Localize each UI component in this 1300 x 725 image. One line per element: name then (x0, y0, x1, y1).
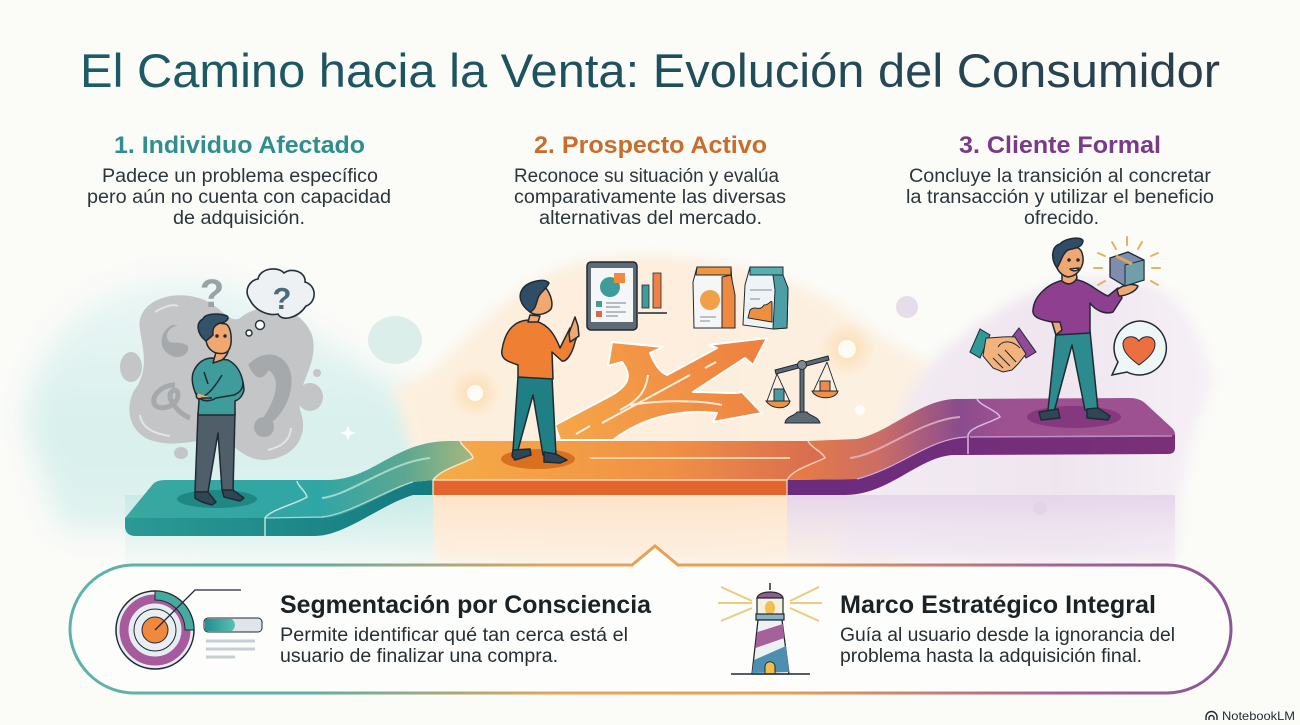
stage 1 description: pero aún no cuenta con capacidad (87, 187, 391, 208)
stage 1 description: Padece un problema específico (102, 166, 378, 187)
icon: target diagram (116, 590, 262, 669)
heading: marco estratégico: Marco Estratégico Integral (840, 591, 1156, 619)
bottom summary panel (70, 546, 1231, 693)
icon: glowing package (1094, 237, 1160, 286)
icon: handshake (970, 328, 1036, 372)
fan of path arrows (555, 338, 767, 440)
icon: product bag orange (693, 267, 735, 328)
text: marco estratégico: Guía al usuario desde la ignorancia del (840, 625, 1175, 646)
icon: lighthouse (718, 583, 822, 674)
stage 2 description: comparativamente las diversas (514, 187, 786, 208)
stage 3 heading: 3. Cliente Formal (959, 132, 1161, 159)
stage 2 description: Reconoce su situación y evalúa (514, 166, 779, 187)
title: El Camino hacia la Venta: Evolución del Consumidor (80, 44, 1220, 97)
icon: tablet with charts (587, 262, 667, 330)
platform: teal segment (125, 441, 473, 536)
figure 1: thinking man (177, 314, 257, 508)
stage 1 description (87, 166, 391, 229)
stage 1 description: de adquisición. (173, 208, 305, 229)
figure 3: man with package (1027, 238, 1138, 428)
gray confusion cloud (120, 295, 323, 460)
text: segmentación: Permite identificar qué tan cerca está el (280, 625, 628, 646)
icon: product bag teal (743, 267, 788, 329)
icon: thought bubble with question (246, 269, 314, 336)
stage 2 description (514, 166, 786, 229)
icon: thought bubble with question: ? (273, 281, 291, 316)
stage 1 heading: 1. Individuo Afectado (114, 132, 365, 159)
platform: purple segment (787, 398, 1175, 495)
heading: segmentación: Segmentación por Consciencia (280, 591, 652, 619)
platform: orange segment (433, 441, 825, 495)
sparkle (340, 425, 356, 441)
icon: heart speech bubble (1112, 321, 1166, 375)
NotebookLM mark: NotebookLM (1222, 709, 1295, 723)
stage 3 description: Concluye la transición al concretar (909, 166, 1212, 187)
text: segmentación: usuario de finalizar una compra. (280, 646, 558, 667)
icon: balance scale (766, 356, 838, 423)
stage 3 description (906, 166, 1214, 229)
text: segmentación (280, 625, 628, 667)
stage 2 description: alternativas del mercado. (539, 208, 762, 229)
text: marco estratégico: problema hasta la adquisición final. (840, 646, 1142, 667)
figure 2: man pointing (501, 280, 767, 469)
text: marco estratégico (840, 625, 1175, 667)
stage 3 description: la transacción y utilizar el beneficio (906, 187, 1214, 208)
stage 3 description: ofrecido. (1024, 208, 1099, 229)
icon: floating question mark: ? (200, 272, 224, 316)
path platform (125, 398, 1175, 536)
stage 2 heading: 2. Prospecto Activo (534, 132, 767, 159)
